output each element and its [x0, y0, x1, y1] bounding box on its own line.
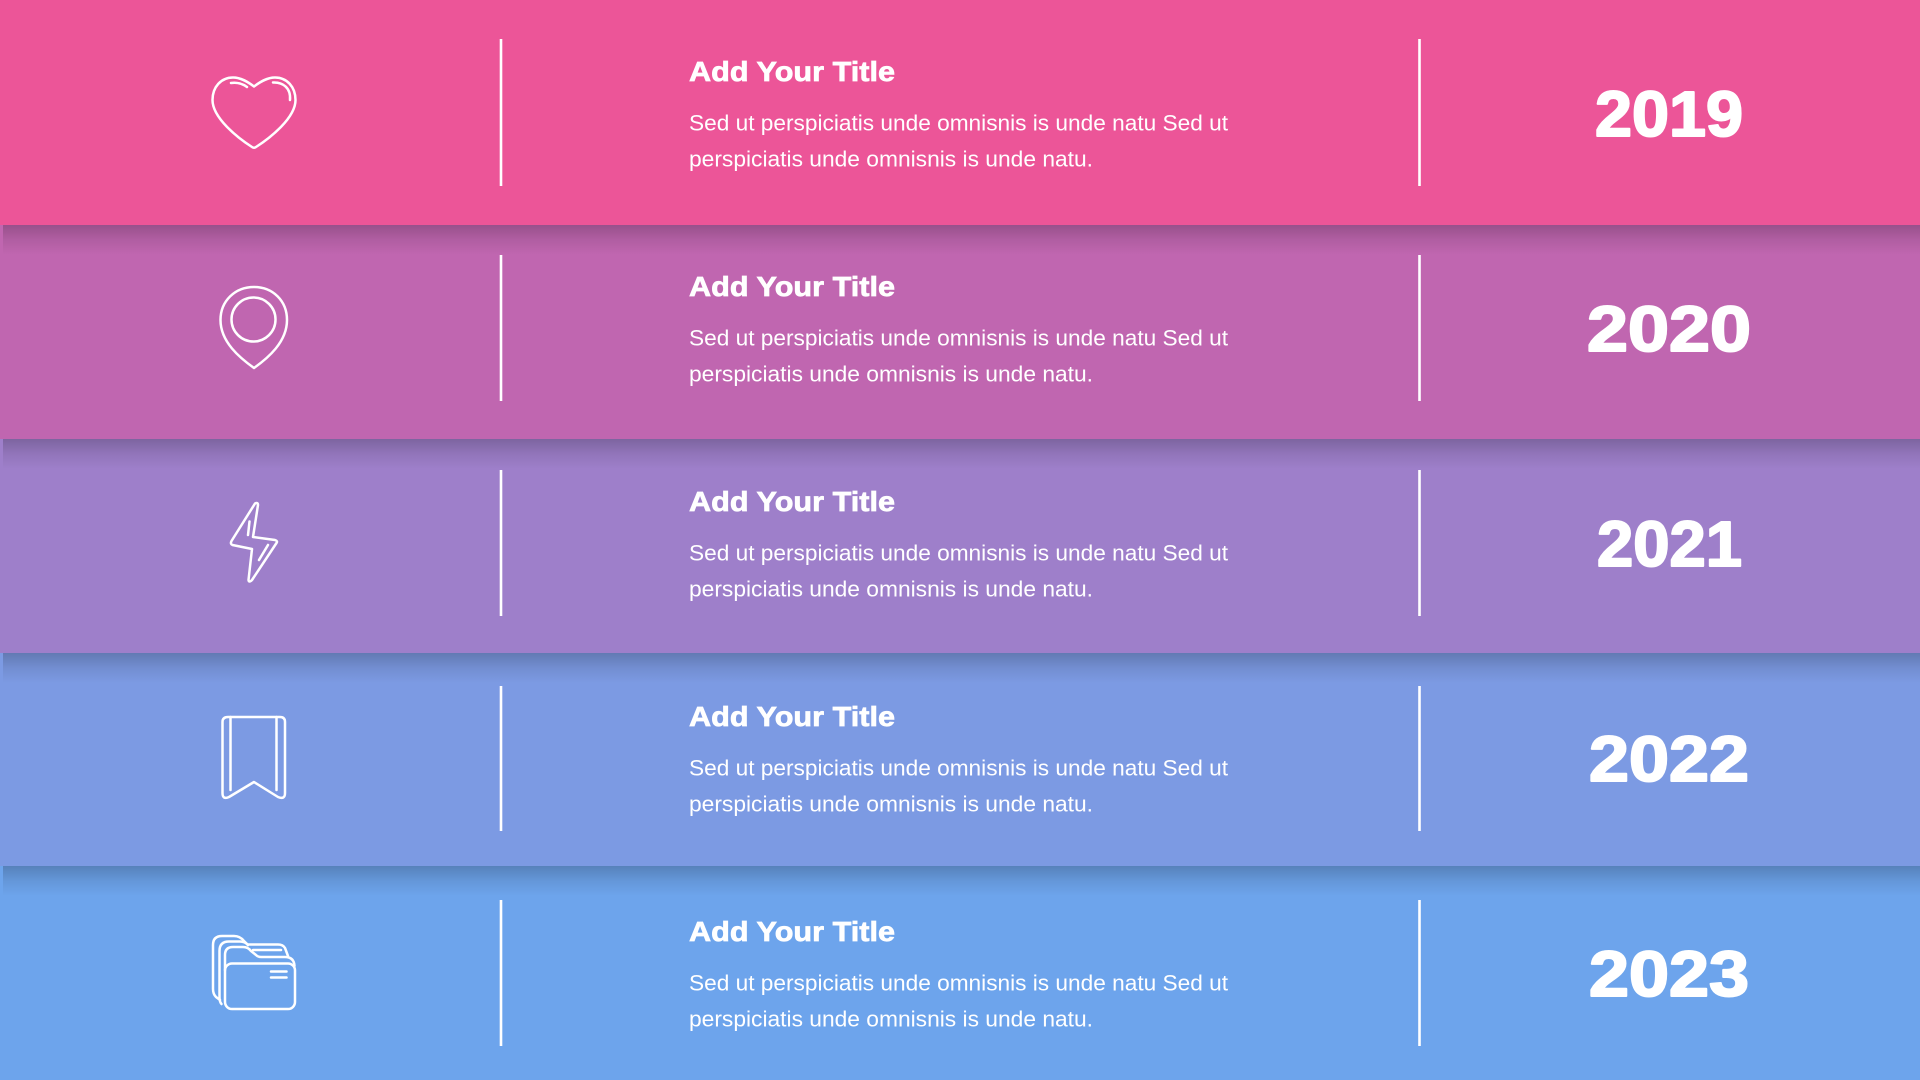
- icon: location pin: [220, 287, 287, 368]
- divider left: [500, 686, 502, 831]
- panel: row 2020: [0, 225, 1920, 439]
- shadow 2020: [3, 225, 1920, 255]
- body text: [689, 756, 1228, 816]
- year 2023: 2023: [1589, 938, 1749, 1010]
- icon: lightning bolt: [231, 503, 277, 582]
- shadow 2021: [3, 439, 1920, 469]
- panel: row 2023: [0, 866, 1920, 1080]
- band 2023: [0, 866, 1920, 1080]
- band 2019: [0, 0, 1920, 225]
- body text: perspiciatis unde omnisnis is unde natu.: [689, 1006, 1093, 1032]
- divider right: [1418, 255, 1421, 401]
- body text: Sed ut perspiciatis unde omnisnis is unde natu Sed ut: [689, 326, 1228, 350]
- year 2020: 2020: [1587, 293, 1751, 365]
- divider right: [1418, 686, 1421, 831]
- body text: [689, 540, 1228, 602]
- title: Add Your Title: [689, 271, 895, 302]
- icon: bookmark: [222, 717, 285, 798]
- body text: perspiciatis unde omnisnis is unde natu.: [689, 576, 1093, 602]
- divider right: [1418, 900, 1421, 1046]
- body text: [689, 970, 1228, 1032]
- body text: Sed ut perspiciatis unde omnisnis is unde natu Sed ut: [689, 540, 1228, 566]
- body text: perspiciatis unde omnisnis is unde natu.: [689, 362, 1093, 386]
- title: Add Your Title: [689, 56, 895, 87]
- body text: Sed ut perspiciatis unde omnisnis is unde natu Sed ut: [689, 756, 1228, 780]
- divider left: [500, 39, 502, 186]
- title: Add Your Title: [689, 701, 895, 732]
- panel: row 2019: [0, 0, 1920, 225]
- divider right: [1418, 39, 1421, 186]
- body text: [689, 110, 1228, 172]
- body text: [689, 326, 1228, 386]
- icon: heart: [212, 78, 296, 148]
- divider right: [1418, 470, 1421, 616]
- year 2022: 2022: [1589, 723, 1749, 795]
- divider left: [500, 470, 502, 616]
- shadow 2023: [3, 866, 1920, 896]
- shadow 2022: [3, 653, 1920, 683]
- body text: perspiciatis unde omnisnis is unde natu.: [689, 792, 1093, 816]
- panel: row 2022: [0, 653, 1920, 866]
- body text: perspiciatis unde omnisnis is unde natu.: [689, 146, 1093, 172]
- divider left: [500, 255, 502, 401]
- panel: row 2021: [0, 439, 1920, 653]
- band 2020: [0, 225, 1920, 439]
- band 2022: [0, 653, 1920, 866]
- title: Add Your Title: [689, 486, 895, 517]
- year 2021: 2021: [1597, 508, 1742, 580]
- body text: Sed ut perspiciatis unde omnisnis is unde natu Sed ut: [689, 110, 1228, 136]
- title: Add Your Title: [689, 916, 895, 947]
- year 2019: 2019: [1595, 78, 1743, 150]
- divider left: [500, 900, 502, 1046]
- icon: folders: [213, 936, 295, 1009]
- body text: Sed ut perspiciatis unde omnisnis is unde natu Sed ut: [689, 970, 1228, 996]
- band 2021: [0, 439, 1920, 653]
